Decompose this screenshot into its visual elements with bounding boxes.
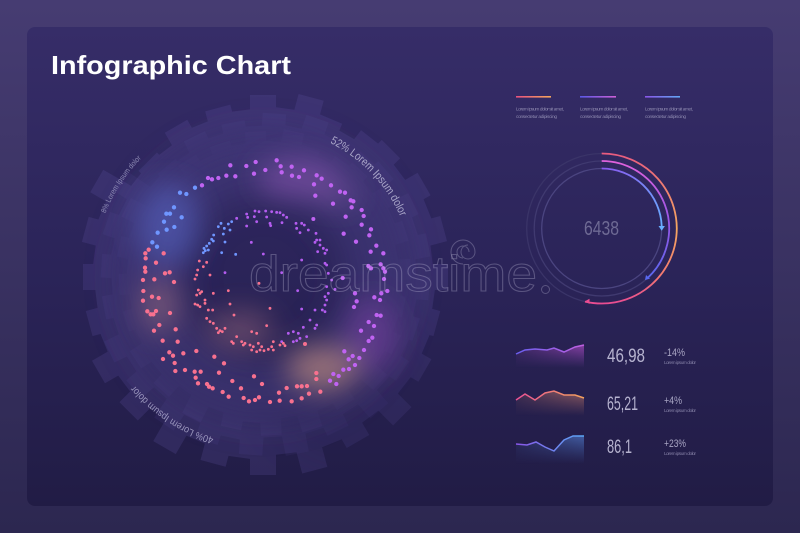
change 2: +4% bbox=[664, 395, 682, 407]
soft purple halo bbox=[151, 165, 375, 389]
value 2: 65,21 bbox=[607, 394, 638, 415]
area chart 2 bbox=[516, 391, 584, 416]
legend item 2 bbox=[580, 96, 628, 120]
legend item 3: Lorem ipsum dolor sit amet, bbox=[645, 106, 693, 112]
title: Infographic Chart bbox=[51, 50, 291, 80]
radial bars bbox=[82, 94, 448, 475]
watermark registered mark bbox=[542, 286, 550, 294]
curved label: 8%: 8% Lorem Ipsum dolor bbox=[101, 156, 140, 213]
legend item 1: Lorem ipsum dolor sit amet, bbox=[516, 106, 564, 112]
watermark spiral mark bbox=[451, 240, 475, 264]
curved label: 52%: 52% Lorem Ipsum dolor bbox=[331, 136, 406, 216]
sparkline row 2 bbox=[516, 391, 696, 416]
inner dot ring bbox=[195, 211, 335, 352]
circular progress gauge bbox=[527, 153, 677, 304]
area chart 1 bbox=[516, 345, 584, 368]
curved label: 40%: 40% Lorem Ipsum dolor bbox=[130, 386, 214, 444]
caption 3: Lorem ipsum dolor bbox=[664, 451, 696, 457]
outer dot ring bbox=[143, 160, 387, 402]
value 3: 86,1 bbox=[607, 437, 632, 458]
stock watermark: dreamstime bbox=[249, 246, 537, 302]
gauge value: 6438 bbox=[584, 218, 619, 240]
legend item 3: consectetur adipiscing bbox=[645, 114, 686, 120]
caption 1: Lorem ipsum dolor bbox=[664, 360, 696, 366]
colour glows bbox=[136, 158, 398, 390]
caption 2: Lorem ipsum dolor bbox=[664, 408, 696, 414]
sparkline row 1 bbox=[516, 345, 696, 368]
change 1: -14% bbox=[664, 347, 685, 359]
legend item 2: Lorem ipsum dolor sit amet, bbox=[580, 106, 628, 112]
legend bbox=[516, 96, 693, 120]
sparkline row 3 bbox=[516, 436, 696, 464]
inner arc bbox=[602, 168, 662, 226]
legend item 1: consectetur adipiscing bbox=[516, 114, 557, 120]
change 3: +23% bbox=[664, 438, 686, 450]
legend item 3 bbox=[645, 96, 693, 120]
legend item 2: consectetur adipiscing bbox=[580, 114, 621, 120]
arrowheads bbox=[585, 226, 665, 304]
outer arc bbox=[585, 153, 677, 303]
radial chart bbox=[82, 94, 448, 475]
area chart 3 bbox=[516, 436, 584, 464]
gauge tracks bbox=[527, 154, 677, 304]
legend item 1 bbox=[516, 96, 564, 120]
value 1: 46,98 bbox=[607, 346, 645, 367]
middle arc bbox=[602, 161, 669, 278]
